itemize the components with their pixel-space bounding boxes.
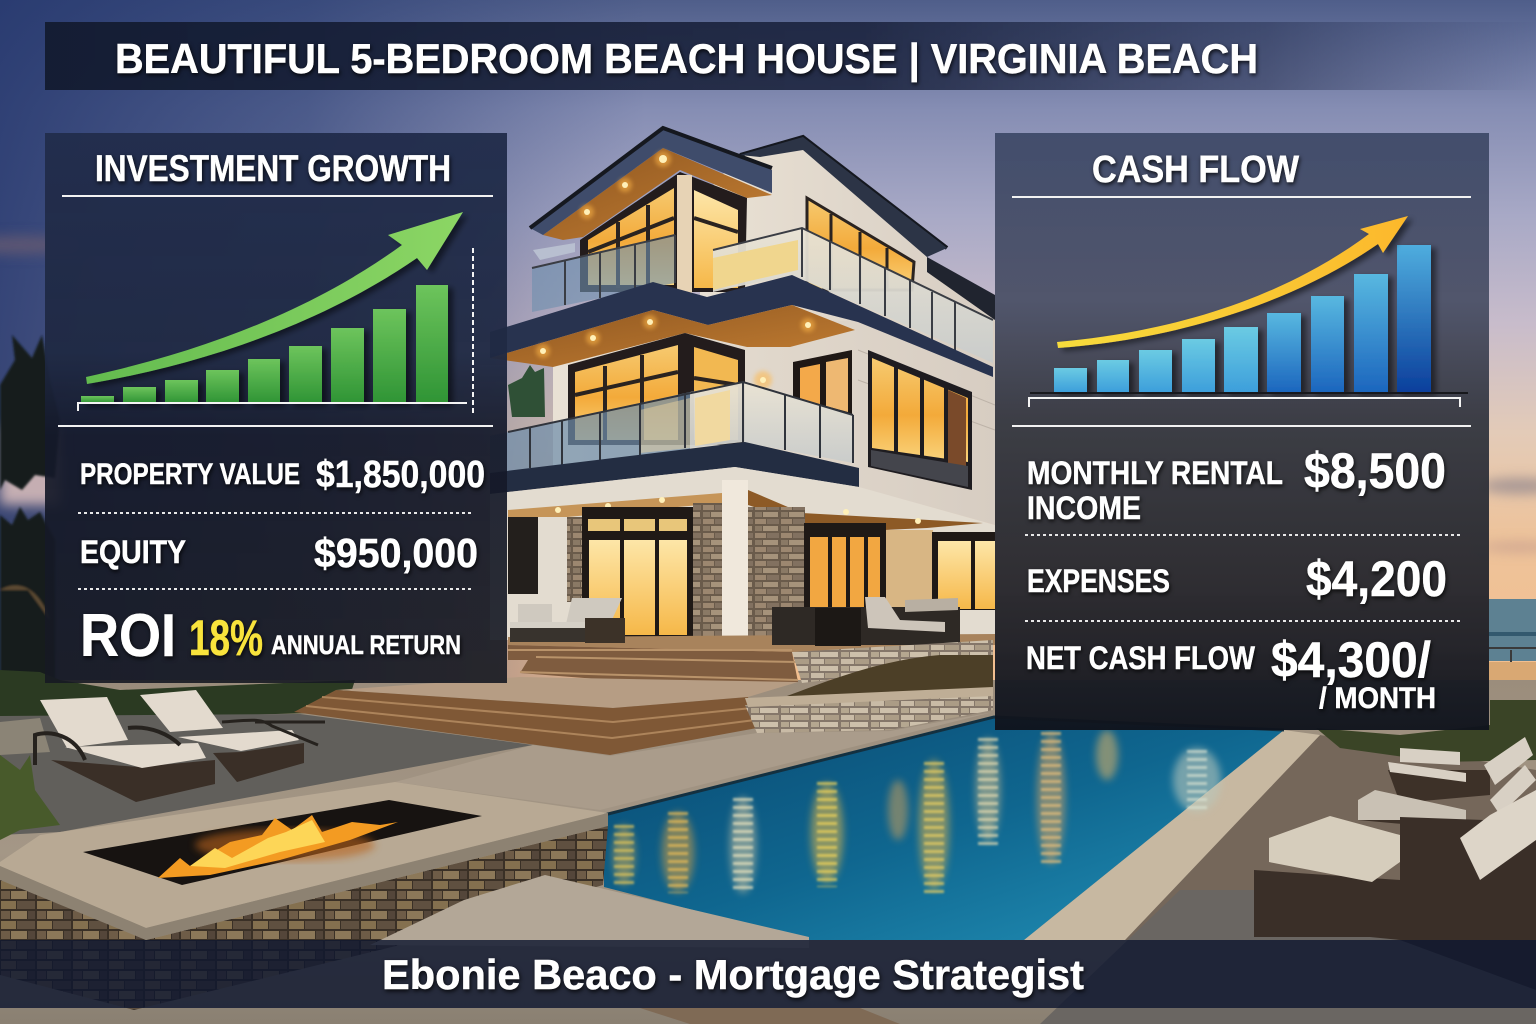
ground floor glass doors xyxy=(582,507,995,639)
left lounge chairs xyxy=(35,690,325,802)
fire pit opening xyxy=(83,800,482,885)
stat: monthly rental income: INCOME xyxy=(1027,490,1141,526)
planter lower xyxy=(745,687,993,733)
terrace furniture xyxy=(510,597,960,646)
beach sand xyxy=(1489,662,1536,730)
patio ground xyxy=(0,680,1536,1024)
arrow: yellow cash flow xyxy=(1057,216,1408,348)
right seating xyxy=(1254,737,1536,990)
heading: investment growth: INVESTMENT GROWTH xyxy=(95,148,451,189)
slate paving left xyxy=(0,714,533,835)
footer text: Ebonie Beaco - Mortgage Strategist xyxy=(382,951,1084,998)
upper wall xyxy=(700,145,995,380)
ground wall warm xyxy=(886,530,933,610)
third lounger xyxy=(1388,770,1490,803)
stat: roi: ANNUAL RETURN xyxy=(271,630,461,660)
stat: property value: $1,850,000 xyxy=(316,454,485,496)
panel: investment growth xyxy=(45,133,507,683)
recessed lights xyxy=(536,151,815,389)
upper right windows xyxy=(807,198,914,290)
paving bottom slab xyxy=(370,875,809,948)
fire pit xyxy=(0,782,608,1010)
ground floor wall xyxy=(490,467,995,640)
stat: net cash flow: $4,300/ xyxy=(1271,632,1431,688)
right door window xyxy=(793,350,852,415)
pool xyxy=(395,712,1320,940)
second roof xyxy=(740,137,947,257)
ground soffit lights xyxy=(555,497,921,524)
stat: monthly rental income: $8,500 xyxy=(1304,443,1446,499)
front chair back cushion xyxy=(1460,790,1536,880)
ground soffit right xyxy=(748,490,983,530)
stat: property value: PROPERTY VALUE xyxy=(80,458,300,491)
pool reflections ripples xyxy=(624,732,1197,893)
pool water xyxy=(604,717,1284,940)
bottom paving tones xyxy=(640,1008,900,1024)
planter upper xyxy=(792,640,993,683)
right paving xyxy=(1125,735,1536,940)
entry column xyxy=(722,480,748,650)
upper roof fascia xyxy=(530,128,772,235)
stat: net cash flow: NET CASH FLOW xyxy=(1026,640,1256,676)
stone paving far left xyxy=(0,718,50,755)
pool deck xyxy=(395,712,993,810)
beach railing xyxy=(1489,648,1536,668)
stat: equity xyxy=(80,530,478,576)
upper steps xyxy=(508,645,798,689)
palm trees left xyxy=(0,335,60,680)
dark left window xyxy=(508,517,538,594)
title text: BEAUTIFUL 5-BEDROOM BEACH HOUSE | VIRGINIA BEACH xyxy=(115,35,1258,83)
flower bed xyxy=(787,655,993,698)
bar chart: cash flow xyxy=(1029,216,1468,407)
heading: cash flow: CASH FLOW xyxy=(1092,149,1299,191)
siding lines xyxy=(858,350,995,535)
second floor slab xyxy=(490,275,993,377)
ground soffit left xyxy=(508,493,722,517)
stat: expenses xyxy=(1027,551,1447,607)
rear roof band xyxy=(927,257,995,320)
left eave under roof xyxy=(533,243,575,260)
stat: net cash flow xyxy=(1026,632,1436,715)
stat: equity: EQUITY xyxy=(80,534,186,570)
middle windows xyxy=(568,333,745,445)
stat: roi xyxy=(80,602,461,669)
bar chart: growth xyxy=(78,212,473,416)
stone columns xyxy=(567,503,805,642)
footer bar xyxy=(0,940,1536,1008)
fire pit coping edge xyxy=(0,813,608,940)
upper windows xyxy=(580,172,747,297)
arrow: green growth xyxy=(86,212,463,384)
background palm near house xyxy=(508,365,545,417)
pool reflections soft xyxy=(613,730,1221,893)
stat: roi: 18% xyxy=(189,610,263,666)
sky xyxy=(0,0,1536,720)
sky clouds xyxy=(0,236,1536,552)
second lounger xyxy=(1358,806,1470,830)
stone terrace surface xyxy=(336,677,798,708)
fire pit stone side xyxy=(0,826,608,1010)
flames glow xyxy=(195,829,375,861)
far lounger xyxy=(1400,748,1460,765)
panel: cash flow xyxy=(995,133,1489,730)
front lounger xyxy=(51,760,215,802)
second floor soffit xyxy=(490,305,855,367)
front chair wicker xyxy=(1254,790,1536,990)
front chair seat cushion xyxy=(1269,816,1400,882)
stat: net cash flow: / MONTH xyxy=(1319,682,1436,715)
large right windows xyxy=(868,350,972,490)
second floor balcony glass xyxy=(490,382,853,474)
upper soffit xyxy=(543,148,772,240)
stat: expenses: $4,200 xyxy=(1306,551,1447,607)
stat: expenses: EXPENSES xyxy=(1027,563,1170,599)
mid wall xyxy=(553,320,995,525)
ocean xyxy=(1489,599,1536,661)
right shrubs xyxy=(1316,700,1536,762)
pool coping xyxy=(1024,730,1320,940)
rear lounger xyxy=(213,743,304,782)
title bar xyxy=(45,22,1536,90)
fire pit coping top xyxy=(0,782,608,928)
stat: roi: ROI xyxy=(80,602,176,669)
stat: equity: $950,000 xyxy=(314,530,478,576)
plant foreground left xyxy=(0,755,60,840)
stat: monthly rental income: MONTHLY RENTAL xyxy=(1027,455,1283,491)
lower steps xyxy=(294,690,757,755)
house xyxy=(294,128,995,755)
terrace floor xyxy=(508,634,995,652)
upper balcony glass xyxy=(532,228,993,363)
second floor band xyxy=(490,442,859,494)
shrubs behind loungers xyxy=(0,670,355,722)
stat: property value xyxy=(80,454,485,496)
stat: monthly rental income xyxy=(1027,443,1446,526)
flames xyxy=(158,815,398,878)
